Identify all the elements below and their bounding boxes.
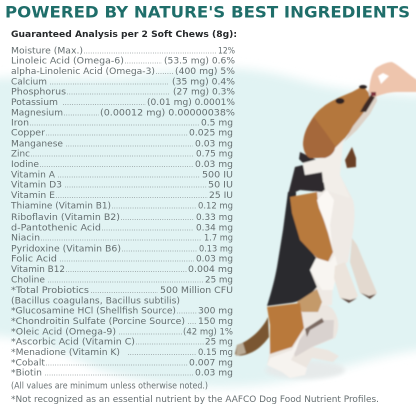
row: manganese: 0.03 mg [195,140,233,150]
row: moisture: Moisture (Max.) [11,46,83,56]
row: vitamin E: 25 IU [209,191,233,201]
row: oleic acid: *Oleic Acid (Omega-9) [11,328,116,338]
row: potassium: (0.01 mg) 0.0001% [147,98,235,108]
near front leg [334,262,358,303]
white chest highlight [317,190,334,246]
row: choline [11,276,233,286]
soft ground shadow [265,361,345,379]
mouth [360,93,375,112]
treat [371,92,376,96]
row: copper: 0.025 mg [189,128,233,138]
row: alpha-linolenic acid [11,67,235,77]
row: thiamine [10,202,233,212]
title: POWERED BY NATURE'S BEST INGREDIENTS [5,2,410,22]
row: magnesium: Magnesium [11,108,63,118]
row: magnesium: (0.00012 mg) 0.00000038% [100,108,235,118]
rear thigh shading [293,320,334,357]
row: calcium: Calcium [11,78,47,88]
row: vitamin D3: Vitamin D3 [11,180,62,190]
row: cobalt: *Cobalt [11,358,46,368]
table heading: Guaranteed Analysis per 2 Soft Chews (8g): [11,30,237,40]
row: pyridoxine: Pyridoxine (Vitamin B6) [11,244,121,254]
row: riboflavin [11,213,233,223]
row: copper [11,128,233,138]
row: linoleic acid: Linoleic Acid (Omega-6) [11,56,124,66]
row: phosphorus [11,88,235,98]
brown shoulder [290,192,333,262]
row: vitamin B12: Vitamin B12 [11,265,65,275]
row: zinc [11,150,233,160]
row: iodine: Iodine [11,160,39,170]
row: bacillus strains: (Bacillus coagulans, Bacillus subtilis) [11,296,180,306]
row: cobalt: 0.007 mg [189,358,233,368]
row: moisture: 12% [218,46,235,56]
row: choline: 25 mg [205,276,233,286]
row: manganese [11,140,233,150]
row: iodine: 0.03 mg [195,160,233,170]
row: zinc: 0.75 mg [196,150,233,160]
tan belly patch [297,289,322,312]
row: glucosamine: *Glucosamine HCl (Shellfish Source) [11,306,176,316]
row: phosphorus: (27 mg) 0.3% [173,88,235,98]
black saddle [267,192,317,306]
footnote: minimum values: (All values are minimum unless otherwise noted.) [11,382,208,392]
row: choline: Choline [11,276,45,286]
row: calcium: (35 mg) 0.4% [172,78,235,88]
row: potassium: Potassium [11,98,58,108]
row: thiamine: Thiamine (Vitamin B1) [10,202,111,212]
footnote: AAFCO: *Not recognized as an essential nutrient by the AAFCO Dog Food Nutrient Profiles. [11,395,379,405]
row: alpha-linolenic acid: alpha-Linolenic Acid (Omega-3) [11,67,155,77]
white rear foot [267,329,307,378]
row: folic acid: 0.03 mg [196,254,233,264]
background: pale teal cloud [0,68,416,387]
row: menadione: 0.15 mg [198,348,233,358]
torso white [297,158,355,306]
black neck spot [299,152,317,163]
row: riboflavin: Riboflavin (Vitamin B2) [11,213,120,223]
row: niacin: 1.7 mg [204,234,233,244]
row: chondroitin: 150 mg [198,317,233,327]
row: folic acid [11,254,233,264]
row: total probiotics [11,286,233,296]
row: alpha-linolenic acid: (400 mg) 5% [175,67,235,77]
nutrient table [10,46,235,378]
row: niacin: Niacin [11,234,40,244]
row: chondroitin: *Chondroitin Sulfate (Porcine Source) [11,317,185,327]
row: niacin [11,234,233,244]
row: biotin: 0.03 mg [195,368,233,378]
row: copper: Copper [11,128,45,138]
row: vitamin B12 [11,265,233,275]
brown rump [267,303,304,354]
row: moisture [11,46,235,56]
eye [336,98,344,104]
dark belly marking [305,318,324,337]
row: calcium [11,78,235,88]
row: vitamin D3: 50 IU [208,180,233,190]
row: iron [11,118,233,128]
row: linoleic acid: (53.5 mg) 0.6% [164,56,235,66]
row: manganese: Manganese [11,140,63,150]
row: total probiotics: 500 Million CFU [160,286,233,296]
row: menadione [11,348,233,358]
row: zinc: Zinc [11,150,30,160]
row: oleic acid: (42 mg) 1% [183,328,233,338]
row: biotin [11,368,233,378]
row: total probiotics: *Total Probiotics [11,286,89,296]
tail [235,317,269,356]
body silhouette [267,300,339,378]
tail tip shading [236,343,246,356]
row: potassium [11,98,235,108]
row: iodine [11,160,233,170]
row: oleic acid [11,328,233,338]
row: iron: 0.5 mg [201,118,233,128]
row: ascorbic acid: *Ascorbic Acid (Vitamin C) [11,338,135,348]
row: magnesium [11,108,235,118]
nose [359,85,367,89]
row: folic acid: Folic Acid [11,254,57,264]
row: pyridoxine: 0.13 mg [199,244,233,254]
row: vitamin E [11,191,233,201]
row: d-pantothenic acid: d-Pantothenic Acid [11,224,101,234]
row: cobalt [11,358,233,368]
ear [303,117,335,158]
row: linoleic acid [11,56,235,66]
row: ascorbic acid: 25 mg [205,338,233,348]
row: biotin: *Biotin [11,368,42,378]
white neck [303,138,350,198]
row: phosphorus: Phosphorus [11,88,66,98]
head [303,86,373,158]
row: ascorbic acid [11,338,233,348]
white patch above legs [310,255,338,290]
row: iron: Iron [11,118,29,128]
illustration: beagle [235,62,416,379]
row: vitamin A [11,170,233,180]
collar patch [288,165,328,195]
row: thiamine: 0.12 mg [198,202,233,212]
hand [369,62,416,97]
paw markings [341,293,376,303]
row: vitamin A: 500 IU [202,170,233,180]
row: vitamin D3 [11,180,233,190]
row: d-pantothenic acid: 0.34 mg [196,224,233,234]
row: vitamin E: Vitamin E [11,191,55,201]
row: vitamin A: Vitamin A [11,170,55,180]
row: pyridoxine [11,244,233,254]
row: glucosamine: 300 mg [198,306,233,316]
far front leg [350,238,377,299]
white muzzle [344,90,377,142]
row: riboflavin: 0.33 mg [196,213,233,223]
far ear [345,147,356,168]
row: vitamin B12: 0.004 mg [188,265,233,275]
row: menadione: *Menadione (Vitamin K) [11,348,120,358]
row: d-pantothenic acid [11,224,233,234]
